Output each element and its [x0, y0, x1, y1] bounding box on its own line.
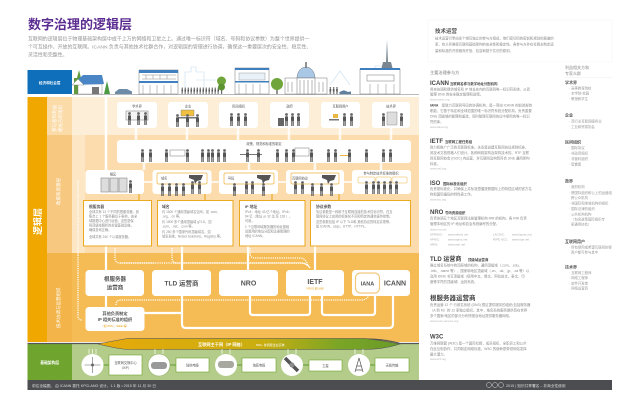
entry: NRO: www.nro.net — [430, 228, 447, 232]
text box: protocol parameters: 协议参数是一种用于互联网连接的技术性标识符，在互 — [316, 209, 393, 214]
card: numbers — [219, 170, 278, 196]
box: internet exchange centre: （IXP） — [120, 365, 131, 370]
card: names: 域名 — [161, 176, 167, 180]
entry: NRO: 管理本地区的 IP 地址和自治系统编号的分配。 — [430, 221, 499, 226]
card: root zone — [86, 170, 144, 194]
text box: domain names — [158, 200, 233, 246]
sidebar: business — [565, 112, 602, 129]
entry: ICANN: 职能，它基于特定和全球范围的唯一标识符系统分配机构。负责重要 — [430, 108, 532, 113]
box: submarine cable — [242, 358, 276, 372]
entry: IETF: www.ietf.org — [430, 166, 447, 170]
entry: NRO: AFRINIC: — [430, 232, 443, 236]
sidebar: business: · 工业和贸易协会 — [569, 124, 595, 129]
icon: house — [72, 70, 110, 94]
sidebar: internet users: 用户都可参与其中 — [571, 250, 599, 254]
entry: ISO: www.iso.org — [430, 198, 447, 202]
operator: NRO: NRO — [241, 280, 257, 288]
entry: W3C: 万维网联盟 (W3C) 是一个国际社群，成员组织、全职员工和公众 — [430, 340, 527, 346]
text box: protocol parameters — [310, 200, 410, 246]
icon: submarine cable — [215, 349, 237, 376]
box: wireless — [375, 358, 409, 372]
text box: protocol parameters: 联网协议上应用的标准化不同和特定的通信操作控制。 — [316, 214, 392, 218]
sublayer label: participants: 相关方的组织 — [57, 105, 64, 132]
panel: technical operations — [428, 20, 612, 62]
entry: IETF: 标准。 — [430, 161, 440, 166]
box: satellite: 卫星 — [322, 363, 329, 368]
operator: TLD operators: TLD 运营商 — [165, 278, 199, 288]
text box: domain names: .org、.cn 等。 — [162, 214, 182, 218]
entry: W3C: www.w3.org — [430, 357, 447, 361]
box: wireless: 无线传输 — [386, 362, 399, 368]
operator: other standards organisations: IP 相关标准的组织 — [98, 316, 133, 323]
internet backbone band: 互联网主干网（IP 网络） — [198, 341, 245, 348]
sidebar: internet users — [565, 238, 612, 254]
entry: NRO: www.arin.net — [448, 242, 465, 246]
sidebar: government: · 政府机构 — [569, 184, 585, 189]
icon: satellite — [281, 349, 303, 376]
entry: ISO: 负责按标准化，并确保上并标准遵循按照国际上的特性区域的官方名 — [430, 186, 532, 191]
entry: ICANN — [430, 81, 533, 129]
card: academia — [117, 102, 157, 128]
text box: IP addresses: IP 地址 — [245, 204, 257, 209]
panel: technical operations: 量和标准的开放磋商开放、包容和基于共识的原则。 — [435, 48, 513, 53]
entry: ISO: 国际标准化组织 — [443, 181, 467, 186]
sidebar: civil society: · 国际协议 — [569, 145, 585, 150]
entry: TLD operators: TLD 运营商 — [430, 255, 461, 263]
entry: ICANN: 互联网名称与数字地址分配机构 — [450, 81, 498, 86]
sidebar: technical community: 技术界 — [565, 264, 577, 270]
sidebar: academia: · 教授和学生 — [569, 96, 589, 101]
entry: ICANN: 用来协调和提供域名和 IP 地址在内的互联网唯一标识符系统，从而 — [430, 86, 531, 92]
text box: protocol parameters: 如 ICANN、ssqs、HTTP、HTTPs。 — [316, 224, 368, 228]
operator: IETF: IETF — [307, 279, 323, 286]
entry: W3C: 在此互相协作，共同制定网络标准。W3C 的使命是带领网站发挥 — [430, 346, 527, 351]
orange arrows — [138, 189, 340, 200]
logical layer label: 逻辑层 — [32, 208, 43, 235]
entry: TLD operators: 顶级域运营商 — [468, 257, 489, 262]
text box: IP addresses: 地址 ICANN。 — [245, 233, 265, 238]
sublayer label: resources: 政策和资源层 — [55, 178, 62, 205]
entry: ICANN: 符的库。 — [430, 119, 444, 124]
text box: IP addresses: 64 亿（地址 从 32 位 至 128 ）。 — [245, 214, 292, 218]
panel: technical operations: 技术运营引擎由多个相互独立的参与方组成，他们密切同的密前和规划的离道的 — [435, 36, 554, 40]
entry: TLD operators: 度等字符的顶级域）运其系统。 — [430, 279, 477, 284]
sidebar: government: （包含政策国际组织专 — [571, 216, 606, 222]
panel: technical operations: 技术运营 — [435, 27, 458, 35]
sublayer label: operators: 技术协调与运营组织 — [55, 287, 62, 328]
sidebar: academia: 学术界 — [565, 79, 577, 85]
text box: IP addresses: IPv4：地址 43 亿个地址。IPv6： — [245, 209, 292, 214]
panel: technical operations: 束，有义务确保互联网基础架构的安全性和稳定性。各参与方并在社群去制定适 — [435, 42, 554, 46]
intro text — [28, 36, 311, 58]
sidebar: civil society: · 智囊团 — [569, 162, 582, 166]
box: land cable: 陆地电缆 — [186, 362, 200, 368]
sidebar: technical community: · 网络工程师 — [569, 275, 589, 280]
sidebar: government: 家通用协会） — [571, 222, 591, 226]
sublayer label: participants: 参与者和利益 — [51, 105, 58, 132]
entry: IETF — [430, 139, 530, 170]
text box: IP addresses: 1 个互联网域服务器的地址基础 — [245, 224, 289, 229]
operator: IETF — [286, 270, 344, 296]
city skyline illustration — [72, 40, 419, 94]
text box: IP addresses: 可用。 — [245, 219, 255, 223]
entry: NRO — [430, 210, 532, 246]
heading: main governance participants: 主要治理参与方 — [430, 69, 459, 76]
entry: NRO: LACNIC: — [493, 232, 505, 236]
card: standards bodies: 参与制定技术标准的组织 — [363, 170, 399, 176]
text box: root servers: 集合上 1 个服务器位于各地，由全 — [89, 214, 138, 218]
icon: tree — [217, 76, 226, 94]
entry: NRO: NRO — [430, 210, 444, 216]
entry: NRO: www.afrinic.net — [448, 232, 468, 236]
panel: logical layer background — [28, 97, 419, 342]
text box: protocol parameters: 这些参数包括 IP 以下 TLD和 其他协议的特定实现等， — [316, 219, 392, 224]
card: technical community: 技术界 — [386, 104, 397, 108]
sidebar: internet users: 互联网用户 — [565, 238, 585, 244]
panel: infrastructure layer background: 基础架构层 — [40, 360, 59, 365]
card: numbers: 号码 — [228, 176, 234, 180]
icon: radio tower — [348, 349, 370, 376]
sidebar: civil society: 民间组织 — [565, 138, 581, 144]
entry: ISO — [430, 181, 532, 202]
card: standards bodies — [352, 170, 411, 194]
card: civil society: 民间组织 — [232, 104, 245, 108]
entry: ICANN: IANA 是致力互联网号码的协调机构，是一项由 ICANN 的前述部的 — [430, 102, 533, 108]
card: internet protocols: 互联网协议 — [292, 176, 309, 180]
sidebar: technical community — [565, 264, 592, 290]
icon: tower building — [360, 40, 400, 94]
entry: NRO: 负责协调五个地区互联网注册管理机构 RIR 的机构。各 RIR 负责 — [430, 216, 527, 220]
sidebar: technical community: · 网络运营商 — [569, 286, 589, 290]
box: land cable — [176, 358, 209, 372]
operator: other standards organisations: （如 W3C、IEEE 等） — [101, 324, 129, 328]
text box: domain names: 约 250 多个国家代码顶级域名，如 — [162, 229, 211, 234]
intro text: 互联网的逻辑层位于物理基础架构层中成千上万的网络和卫星之上。通过唯一标识符（域名、号码和协议参数）为整个世界提供一 — [28, 36, 309, 42]
icon: terrestrial cable — [148, 349, 170, 376]
footer bar — [28, 380, 612, 390]
text box: root servers: 全球共有 240 个以量服务器。 — [89, 234, 131, 239]
text box: domain names: 域名系统，Netsol Solutions，Registry 等。 — [162, 234, 223, 238]
entry: ICANN: DNS 顶级域的管理和重选，同时管理互联网协议中使用的唯一标识 — [430, 114, 530, 118]
sidebar: government — [565, 178, 612, 226]
entry: NRO: ARIN: — [430, 242, 438, 246]
entry: root server operators: 根服务器运营商 — [430, 293, 476, 302]
entry: IETF: 致力和推广广泛的互联网标准。关系是创建互联网协议规则标准， — [430, 144, 528, 150]
card: names — [152, 170, 212, 196]
operator: ICANN and IANA: IANA — [361, 282, 374, 288]
entry: root server operators — [430, 293, 531, 323]
panel: policy and standards development: 政策、规范和标准的制定 — [246, 141, 282, 146]
entry: ISO: 称和国际编码的特性表工作。 — [430, 192, 474, 196]
panel: social and economic layer label — [28, 70, 72, 94]
infrastructure connector line — [103, 364, 375, 366]
entry: IETF: 网互联网协会 (ISOC) 内运营，并互联网及构筑符合 UNE 通用架构 — [430, 156, 530, 160]
text box: root servers: 全球共有 13 个不同的根服务器，其 — [89, 209, 140, 214]
sidebar: government: · 公共机构机构 — [569, 212, 592, 216]
entry: W3C: 最大潜力。 — [430, 352, 447, 356]
entry: ICANN: www.iana.org — [430, 125, 448, 129]
sublayer label: participants — [51, 105, 64, 132]
icon: street people and vehicles — [330, 87, 351, 94]
card: business — [168, 102, 208, 128]
sidebar heading: stakeholders: 专家众群 — [565, 70, 581, 76]
card: civil society — [219, 102, 258, 128]
entry: W3C — [430, 334, 527, 361]
entry: TLD operators: 及用 IDNS 书写顶级域（使用中文、俄文、阿拉伯文、泰文、印 — [430, 274, 525, 278]
icon: office building — [235, 68, 269, 94]
operator: ICANN and IANA: ICANN — [384, 280, 406, 288]
intro text: 个可互操作、开放的互联网。ICANN 负责与其他技术社群合作，对逻辑层的管理进行协调，确保这一重要层次的安全性、稳定性、 — [28, 44, 311, 50]
entry: ICANN: ICANN — [430, 81, 449, 87]
box: internet exchange centre — [109, 355, 142, 375]
icon: domed government building — [285, 62, 327, 94]
card: internet protocols — [286, 170, 344, 196]
text box: domain names: 域名 — [162, 204, 170, 209]
operator: TLD operators — [152, 270, 211, 296]
operator: NRO — [219, 270, 278, 296]
sidebar: government: · 非国际和地域机构的组织 — [569, 200, 609, 206]
title: 数字治理的逻辑层 — [28, 17, 132, 32]
sidebar: technical community: · 互联网工程师 — [569, 270, 592, 275]
sidebar: academia: · 本学院·校园 — [569, 90, 590, 96]
internet backbone band: 600+ 协调层企业实体 — [256, 342, 285, 347]
sidebar: civil society — [565, 138, 589, 166]
entry: IETF: IETF — [430, 139, 443, 145]
card: internet users: 互联网用户 — [333, 104, 348, 108]
entry: IETF: 其技术文档规格人们设计。各种网络架构及架构技术的。RTF 互联 — [430, 150, 530, 155]
panel: social and economic layer label: 经济和社会层 — [39, 80, 61, 85]
icon: internet exchange point — [82, 349, 104, 376]
operator: IETF: （IRSG 和 IAB） — [304, 286, 326, 290]
operator: root server operators: 根服务器 — [104, 275, 126, 283]
entry: NRO: 号码资源组织 — [445, 210, 466, 215]
operator: other standards organisations — [86, 307, 144, 331]
footer bar: 前往全幅图。 由 ICANN 委托 KPCLANG 设计。1.1 版 • 2015 年 11 月 30 日 — [32, 383, 156, 388]
sidebar: technical community: · 软件开发者 — [569, 280, 589, 286]
sidebar: government: · 国际法律的组织 — [569, 206, 595, 211]
internet backbone band — [28, 338, 419, 350]
sidebar heading: stakeholders — [565, 64, 612, 78]
footer bar: 2015 | 知识共享署名 – 非商业性使用 — [506, 383, 566, 388]
panel: policy and standards development — [117, 140, 411, 163]
text box: domain names: 约 1500 多个通用顶级域 gTLD，如 — [162, 219, 211, 224]
intro text: 灵活性和完整性。 — [28, 52, 68, 58]
entry: NRO: www.lacnic.net — [512, 232, 532, 236]
card: government: 政府 — [286, 104, 293, 108]
text box: root servers: 确保查询正确。 — [89, 227, 111, 232]
sidebar: business: · 商行业互联网服务业 — [569, 118, 602, 124]
text box: root servers: 根服务器 — [89, 204, 104, 209]
box: internet exchange centre: 互联网交换中心 — [114, 360, 137, 365]
sidebar: academia: · 高等教育院校 — [569, 86, 592, 90]
sidebar: government: · 跨国际组织和公上的运营组 — [569, 190, 612, 195]
operator: root server operators — [86, 270, 144, 296]
sidebar: government: 跨公众机构 — [571, 195, 589, 200]
card: government — [270, 102, 309, 128]
sidebar: government: 政界 — [565, 178, 573, 184]
sidebar: academia — [565, 79, 592, 101]
icon: crowd of people — [182, 88, 219, 94]
entry: TLD operators — [430, 255, 530, 284]
entry: root server operators: 多个国家/地区的部分分布情报及地址提供服务器网络。 — [430, 313, 512, 318]
entry: TLD operators: .info、.name 等）、国家和地区顶级域（.cn、.uk、.jp、.ca 等）以 — [430, 268, 530, 273]
box: submarine cable: 海底电缆 — [253, 362, 266, 368]
sidebar: business: 企业 — [565, 112, 573, 118]
entry: ICANN: 管理 DNS 的安全稳定管理和政策。 — [430, 92, 483, 96]
sidebar heading: stakeholders: 利益相关方和 — [565, 64, 589, 70]
text box: protocol parameters: 协议参数 — [316, 204, 331, 209]
operator: other standards organisations: 其他负责制定 — [102, 310, 128, 317]
card: business: 企业 — [185, 104, 191, 108]
text box: root servers: 障顶级域解析的关键基础设施， — [89, 222, 134, 228]
text box: domain names: 约 1500 个通用顶级域名空间，如 .com、 — [162, 209, 220, 214]
entry: NRO: APNIC: — [430, 238, 440, 242]
text box: IP addresses — [240, 200, 305, 246]
text box: root servers: 球数据中心进行运营。这些是保 — [89, 218, 134, 223]
entry: NRO: RIPE NCC: — [493, 238, 508, 242]
entry: root server operators: www.root-servers.org — [430, 319, 459, 323]
card: internet users — [321, 102, 360, 128]
entry: NRO: www.ripe.net — [512, 238, 529, 242]
entry: IETF: 互联网工程任务组 — [445, 139, 473, 144]
entry: TLD operators: 确立域名系统中的顶层域的机构，通用顶级域（.com、.edu、 — [430, 262, 522, 268]
box: satellite — [309, 360, 342, 371]
entry: root server operators: 负责运营 12 个 行政名系统 (DNS) 根区提供服务的组织(包括服务器 — [430, 302, 531, 307]
operator: ICANN and IANA — [352, 270, 410, 296]
sidebar: civil society: · 非政府组织 — [569, 150, 589, 156]
entry: root server operators: （A 到 M）的 12 家独立组织。其中，域名系统服务提供商在世界 — [430, 308, 528, 312]
icon: car — [115, 89, 132, 94]
icon: shop building — [139, 70, 178, 94]
text box: IP addresses: 设置用的地址分配和注册管理的 — [245, 228, 290, 234]
entry: W3C: W3C — [430, 334, 444, 340]
text box: domain names: .com、.net、.com 等。 — [162, 224, 195, 228]
sidebar: internet users: · 所有使用或希望互联网的使 — [569, 244, 612, 250]
sidebar: civil society: · 非营利组织 — [569, 156, 589, 161]
text box: root servers — [84, 200, 152, 246]
connector pipes — [78, 97, 393, 328]
icon: round tree — [271, 78, 283, 94]
operator: root server operators: 运营商 — [107, 284, 124, 292]
card: technical community — [372, 102, 410, 128]
card: root zone: 根区 — [110, 172, 117, 176]
card: academia: 学术界 — [132, 104, 143, 108]
panel: infrastructure layer background — [28, 343, 419, 380]
entry: ISO: ISO — [430, 181, 441, 187]
entry: ICANN: www.icann.org — [430, 98, 450, 102]
entry: NRO: www.apnic.net — [448, 238, 468, 242]
